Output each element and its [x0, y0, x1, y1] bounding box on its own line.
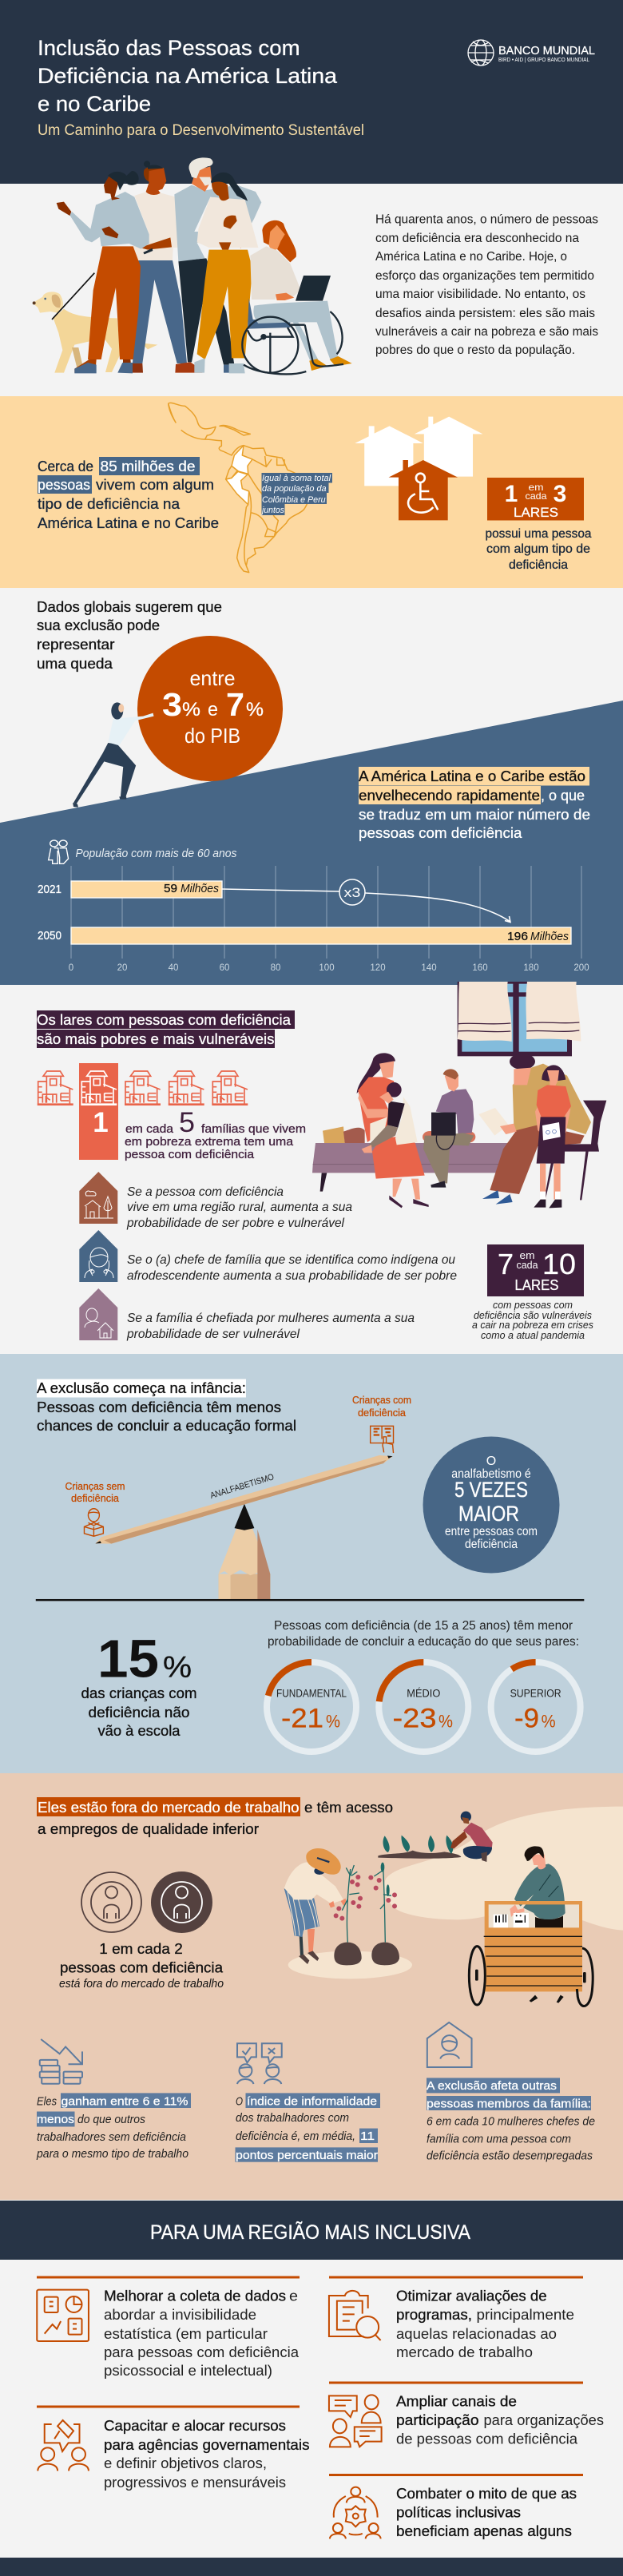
stat box: 7 em cada 10 lares: LARES: [514, 1277, 559, 1293]
panel: capacitar: [37, 2406, 310, 2491]
panel: combater o mito: políticas inclusivas: [396, 2505, 521, 2521]
text: 1 em cada 5 famílias: pessoa com deficiência: [125, 1148, 255, 1161]
text: education intro: probabilidade de concluir a educação do que seus pares:: [268, 1635, 579, 1649]
heading: fora do mercado de trabalho: a empregos de qualidade inferior: [38, 1821, 259, 1837]
text: dados globais: representar: [37, 637, 115, 653]
text: ganham menos: para o mesmo tipo de trabalho: [36, 2147, 188, 2161]
panel: capacitar: progressivos e mensuráveis: [104, 2475, 286, 2491]
intro text: Há quarenta anos, o número de pessoas: [375, 212, 598, 227]
circle: 5 vezes maior: O: [486, 1455, 496, 1468]
stat box: 1 em cada 3 lares: 3: [554, 481, 566, 507]
bar chart: population over 60: 0: [69, 963, 73, 973]
text: indigenous: [127, 1253, 457, 1283]
text: informalidade: deficiência é, em média,: [236, 2129, 355, 2143]
text: 85 milhões: vivem com algum: [96, 477, 214, 493]
text: rural: Se a pessoa com deficiência: [127, 1185, 284, 1199]
icon: informality: [237, 2043, 282, 2084]
text: rural: vive em uma região rural, aumenta a sua: [127, 1201, 352, 1214]
bar chart: population over 60: 60: [220, 963, 229, 973]
icon: elderly couple: [49, 840, 69, 863]
icon: gavel and people: [38, 2420, 89, 2471]
illustration: gardeners and vendor: [284, 1807, 623, 2006]
text: 1 em cada 5 famílias: em cada: [125, 1122, 174, 1136]
bar chart: population over 60: 160: [472, 963, 488, 973]
circle: 5 vezes maior: MAIOR: [458, 1502, 519, 1526]
circle: 3% e 7% do PIB: 3: [162, 686, 182, 723]
text: dados globais: Dados globais sugerem que: [37, 599, 222, 615]
stat box: 1 em cada 3 lares: LARES: [514, 505, 558, 520]
text: 7 em cada 10 detail: a cair na pobreza em crises: [472, 1319, 593, 1331]
donut: médio -23%: MÉDIO: [407, 1687, 440, 1699]
icon: braille book: [371, 1426, 394, 1453]
circle: 5 vezes maior: [423, 1436, 559, 1574]
panel: melhorar a coleta: e: [289, 2288, 298, 2304]
text: dados globais: [37, 599, 222, 672]
logo: Banco Mundial: BANCO MUNDIAL: [498, 44, 595, 58]
map note: Igual à soma total: [262, 474, 331, 483]
panel: combater o mito: [329, 2474, 583, 2539]
icon: gear and people: [330, 2487, 381, 2538]
heading: fora do mercado de trabalho: e têm acesso: [304, 1800, 393, 1816]
intro text: [375, 212, 598, 357]
text: 7 em cada 10 detail: com pessoas com: [493, 1299, 573, 1311]
text: 1 em cada 5 famílias: famílias que vivem: [201, 1122, 306, 1136]
donut: superior -9%: SUPERIOR: [510, 1687, 561, 1699]
text: América Latina envelhecendo: [359, 767, 590, 841]
circle: 3% e 7% do PIB: 7: [226, 686, 244, 723]
title: [38, 36, 338, 116]
panel: melhorar a coleta: para pessoas com deficiência: [104, 2344, 300, 2360]
text: 1 em cada 2: [59, 1941, 224, 1991]
label: crianças com deficiência: [352, 1394, 411, 1419]
bar chart: population over 60: 2050: [38, 930, 62, 943]
stat box: 1 em cada 3 lares: [487, 478, 584, 521]
circle: 3% e 7% do PIB: e: [208, 699, 218, 720]
text: ganham menos: trabalhadores sem deficiência: [37, 2130, 186, 2144]
panel: otimizar avaliações: [329, 2276, 583, 2360]
donut: fundamental -21%: -21: [281, 1704, 323, 1734]
illustration: pencil seesaw: [36, 1455, 584, 1601]
heading: para uma região mais inclusiva: PARA UMA REGIÃO MAIS INCLUSIVA: [150, 2221, 470, 2244]
icon: woman household: [79, 1288, 117, 1340]
label: ANALFABETISMO: ANALFABETISMO: [209, 1472, 276, 1501]
text: rural: [126, 1185, 352, 1230]
panel: otimizar avaliações: programas,: [396, 2307, 472, 2323]
intro text: esforço das organizações tem permitido: [375, 269, 594, 283]
panel: otimizar avaliações: Otimizar avaliações de: [396, 2288, 547, 2304]
donut: médio -23%: -23: [393, 1704, 436, 1734]
text: 85 milhões: Cerca de: [38, 458, 93, 474]
seated man with bag: [423, 1069, 475, 1188]
person 2: [132, 161, 187, 373]
gardener: [284, 1848, 346, 1964]
text: América Latina envelhecendo: pessoas com deficiência: [359, 825, 523, 841]
icon: clipboard magnifier: [329, 2291, 381, 2340]
person 3: [174, 157, 261, 373]
text: exclusão afeta família: [427, 2078, 595, 2163]
heading: fora do mercado de trabalho: [37, 1797, 393, 1837]
stat box: 7 em cada 10 lares: cada: [516, 1259, 538, 1271]
circle: 3% e 7% do PIB: do PIB: [185, 724, 240, 748]
panel: capacitar: e definir objetivos claros,: [104, 2455, 267, 2471]
icon: child reading: [84, 1509, 103, 1536]
text: 7 em cada 10 detail: [472, 1299, 593, 1341]
circle: 5 vezes maior: 5 VEZES: [454, 1478, 528, 1502]
text: América Latina envelhecendo: , o que: [541, 788, 585, 804]
bar chart: population over 60: 196: [507, 931, 528, 943]
stat box: 1 em cada 3 lares: em: [529, 482, 544, 493]
stat box: 7 em cada 10 lares: [487, 1244, 584, 1296]
text: América Latina envelhecendo: se traduz em um maior número de: [359, 807, 590, 823]
text: exclusão afeta família: pessoas membros da família:: [427, 2098, 591, 2111]
bar chart: population over 60: 80: [271, 963, 280, 973]
text: 85 milhões: pessoas: [38, 477, 90, 493]
text: ganham menos: ganham entre 6 e 11%: [61, 2094, 188, 2109]
icon: houses: [355, 417, 482, 520]
text: education intro: Pessoas com deficiência (de 15 a 25 anos) têm menor: [274, 1619, 573, 1633]
donut: fundamental -21%: FUNDAMENTAL: [276, 1687, 347, 1699]
label: crianças com deficiência: Crianças com: [352, 1394, 411, 1406]
text: ganham menos: menos: [37, 2113, 74, 2126]
text: exclusão afeta família: família com uma pessoa com: [427, 2133, 571, 2145]
person 4: [194, 173, 258, 373]
stat: 15%: deficiência não: [88, 1705, 190, 1721]
text: indigenous: Se o (a) chefe de família que se identifica como indígena ou: [127, 1253, 455, 1267]
text: exclusão afeta família: A exclusão afeta outras: [427, 2079, 557, 2093]
panel: melhorar a coleta: psicossocial e intelectual): [104, 2363, 272, 2379]
panel: combater o mito: beneficiam apenas alguns: [396, 2523, 572, 2539]
donut: superior -9%: -9: [514, 1704, 539, 1734]
intro text: América Latina e no Caribe. Hoje, o: [375, 250, 567, 264]
bar chart: population over 60: 140: [421, 963, 437, 973]
text: possui uma pessoa: com algum tipo de: [486, 542, 590, 556]
bar chart: population over 60: 2021: [38, 883, 62, 896]
bar chart: population over 60: 200: [573, 963, 589, 973]
heading: lares mais pobres: [37, 1010, 295, 1048]
text: possui uma pessoa: possui uma pessoa: [486, 527, 592, 541]
text: dados globais: uma queda: [37, 656, 113, 672]
icons: five homes: [38, 1071, 248, 1105]
icon: rural house: [79, 1172, 117, 1224]
donut: médio -23%: [379, 1662, 468, 1752]
window: [458, 982, 581, 1056]
text: informalidade: índice de informalidade: [247, 2094, 377, 2109]
circle: 3% e 7% do PIB: [137, 636, 283, 781]
stat box: 7 em cada 10 lares: 7: [498, 1248, 514, 1280]
potted plants: [334, 1863, 399, 1965]
bar chart: population over 60: x3: [343, 885, 361, 900]
text: 85 milhões: [38, 457, 219, 531]
map: Latin America: [169, 403, 314, 573]
stat box: 1 em cada 3 lares: 1: [505, 481, 518, 507]
label: crianças com deficiência: deficiência: [358, 1407, 407, 1419]
donut: superior -9%: [491, 1662, 581, 1752]
stat: 15%: das crianças com: [81, 1685, 196, 1701]
text: 85 milhões: 85 milhões de: [101, 458, 195, 474]
icon: person filled circle: [151, 1871, 212, 1933]
bar chart: population over 60: 120: [370, 963, 386, 973]
kneeling planter: [378, 1812, 493, 1862]
panel: ampliar canais: Ampliar canais de: [396, 2394, 517, 2410]
map note: Colômbia e Peru: [262, 495, 326, 505]
stat: 15%: %: [163, 1651, 192, 1685]
title: e no Caribe: [38, 92, 151, 116]
panel: ampliar canais: [329, 2382, 604, 2447]
text: women: probabilidade de ser vulnerável: [126, 1328, 300, 1341]
text: informalidade: 11: [360, 2129, 375, 2143]
heading: exclusão na infância: Pessoas com deficiência têm menos: [37, 1399, 281, 1415]
text: América Latina envelhecendo: envelhecendo rapidamente: [359, 788, 540, 804]
panel: ampliar canais: para organizações: [484, 2412, 604, 2428]
label: crianças sem deficiência: deficiência: [71, 1492, 120, 1504]
chair and bench: [312, 1101, 606, 1200]
text: possui uma pessoa: [486, 527, 592, 572]
panel: combater o mito: Combater o mito de que as: [396, 2486, 577, 2502]
panel: melhorar a coleta: abordar a invisibilidade: [104, 2307, 256, 2323]
text: 1 em cada 2: pessoas com deficiência: [60, 1960, 224, 1976]
text: informalidade: [235, 2093, 380, 2162]
illustration: group of people with dog and wheelchair: [33, 157, 352, 374]
bar chart: population over 60: 40: [169, 963, 178, 973]
intro text: com deficiência era desconhecido na: [375, 232, 579, 245]
person 5 in wheelchair: [242, 220, 352, 374]
map note: da população da: [262, 484, 327, 494]
panel: capacitar: Capacitar e alocar recursos: [104, 2418, 286, 2434]
dog: [33, 273, 157, 373]
stat: 15%: vão à escola: [97, 1723, 181, 1739]
text: informalidade: O: [236, 2094, 243, 2109]
heading: exclusão na infância: A exclusão começa na infância:: [37, 1380, 246, 1396]
panel: melhorar a coleta: estatística (em particular: [104, 2326, 268, 2342]
intro text: desafios ainda persistem: eles são mais: [375, 307, 595, 320]
donut: médio -23%: %: [438, 1712, 453, 1732]
donut: fundamental -21%: [267, 1662, 356, 1752]
label: crianças sem deficiência: [65, 1480, 125, 1504]
circle: 3% e 7% do PIB: %: [246, 699, 264, 720]
text: ganham menos: Eles: [37, 2094, 57, 2109]
text: women: [126, 1312, 415, 1341]
intro text: pobres do que o resto da população.: [375, 343, 575, 357]
panel: ampliar canais: participação: [396, 2412, 479, 2428]
circle: 5 vezes maior: analfabetismo é: [451, 1467, 531, 1481]
panel: capacitar: para agências governamentais: [104, 2437, 310, 2453]
icon: falling income: [40, 2039, 82, 2084]
text: 1 em cada 5 famílias: [93, 1107, 306, 1161]
title: Inclusão das Pessoas com: [38, 36, 300, 60]
text: exclusão afeta família: deficiência estão desempregadas: [427, 2149, 593, 2163]
map note: juntos: [260, 506, 284, 515]
circle: 5 vezes maior: entre pessoas com: [445, 1525, 538, 1538]
bar chart: population over 60: 20: [117, 963, 127, 973]
stat box: 1 em cada 3 lares: cada: [526, 490, 547, 502]
donut: fundamental -21%: %: [326, 1712, 340, 1732]
bar chart: population over 60: [38, 866, 589, 973]
circle: 3% e 7% do PIB: %: [182, 699, 200, 720]
logo: Banco Mundial: BIRD • AID | GRUPO BANCO MUNDIAL: [498, 56, 589, 63]
text: ganham menos: [36, 2093, 191, 2161]
text: indigenous: afrodescendente aumenta a sua probabilidade de ser pobre: [127, 1269, 457, 1283]
text: exclusão afeta família: 6 em cada 10 mulheres chefes de: [427, 2115, 595, 2129]
stat: 15%: 15: [97, 1629, 159, 1689]
panel: melhorar a coleta: [37, 2276, 300, 2379]
panel: ampliar canais: de pessoas com deficiência: [396, 2431, 578, 2447]
panel: otimizar avaliações: mercado de trabalho: [396, 2344, 533, 2360]
icon: indigenous person: [79, 1230, 117, 1282]
label: crianças sem deficiência: Crianças sem: [65, 1480, 125, 1492]
vendor with cart: [469, 1846, 593, 2006]
text: 1 em cada 5 famílias: em pobreza extrema tem uma: [125, 1135, 294, 1149]
man and girl: [478, 1054, 591, 1208]
woman with child: [357, 1053, 429, 1208]
text: 85 milhões: tipo de deficiência na: [38, 496, 181, 512]
heading: exclusão na infância: chances de concluir a educação formal: [37, 1418, 296, 1434]
text: América Latina envelhecendo: A América Latina e o Caribe estão: [359, 768, 585, 784]
donut: superior -9%: %: [542, 1712, 556, 1732]
logo: Banco Mundial: [468, 40, 595, 65]
text: 1 em cada 5 famílias: 1: [93, 1107, 109, 1138]
bar chart: population over 60: 180: [523, 963, 539, 973]
icon: person outline circle: [81, 1872, 141, 1932]
subtitle: Um Caminho para o Desenvolvimento Sustentável: [38, 122, 364, 139]
heading: exclusão na infância: [37, 1379, 296, 1434]
illustration: family on bench with window: [312, 982, 606, 1208]
intro text: vulneráveis a cair na pobreza e são mais: [375, 325, 598, 339]
stat box: 7 em cada 10 lares: em: [519, 1249, 535, 1261]
bar chart: population over 60: Milhões: [530, 931, 569, 943]
chart label: População com mais de 60 anos: [75, 847, 236, 860]
text: dados globais: sua exclusão pode: [37, 617, 160, 633]
text: 85 milhões: América Latina e no Caribe: [38, 515, 219, 531]
bar chart: population over 60: Milhões: [181, 883, 219, 895]
icon: data dashboard: [37, 2290, 89, 2341]
illustration: woman pushing circle uphill: [73, 702, 154, 808]
panel: otimizar avaliações: principalmente: [476, 2307, 574, 2323]
bar chart: population over 60: 59: [164, 883, 177, 895]
map note: [260, 473, 332, 515]
coral column highlight: [79, 1063, 118, 1160]
text: 1 em cada 5 famílias: 5: [179, 1107, 195, 1138]
text: informalidade: pontos percentuais maior: [236, 2149, 378, 2162]
text: 1 em cada 2: 1 em cada 2: [99, 1941, 183, 1957]
text: education intro: [268, 1619, 579, 1649]
heading: lares mais pobres: são mais pobres e mais vulneráveis: [37, 1031, 275, 1047]
text: possui uma pessoa: deficiência: [509, 558, 568, 572]
heading: lares mais pobres: Os lares com pessoas com deficiência: [37, 1012, 292, 1028]
icon: people chat: [329, 2395, 382, 2447]
text: 7 em cada 10 detail: como a atual pandemia: [481, 1329, 585, 1341]
text: women: Se a família é chefiada por mulheres aumenta a sua: [127, 1312, 415, 1325]
person 1: [57, 171, 149, 373]
panel: melhorar a coleta: Melhorar a coleta de dados: [104, 2288, 286, 2304]
intro text: uma maior visibilidade. No entanto, os: [375, 288, 585, 301]
panel: otimizar avaliações: aquelas relacionadas ao: [396, 2326, 557, 2342]
icon: household woman: [427, 2022, 472, 2067]
text: 1 em cada 2: está fora do mercado de trabalho: [59, 1977, 224, 1991]
bar chart: population over 60: 100: [319, 963, 335, 973]
text: rural: probabilidade de ser pobre e vulnerável: [126, 1217, 344, 1230]
heading: fora do mercado de trabalho: Eles estão fora do mercado de trabalho: [38, 1800, 300, 1816]
text: ganham menos: do que outros: [77, 2113, 145, 2126]
title: Deficiência na América Latina: [38, 64, 338, 88]
text: 7 em cada 10 detail: deficiência são vulneráveis: [474, 1309, 592, 1321]
circle: 3% e 7% do PIB: entre: [190, 666, 235, 690]
stat: 15%: [81, 1629, 196, 1739]
stat box: 7 em cada 10 lares: 10: [542, 1248, 576, 1280]
circle: 5 vezes maior: deficiência: [465, 1538, 518, 1551]
text: informalidade: dos trabalhadores com: [236, 2111, 349, 2125]
